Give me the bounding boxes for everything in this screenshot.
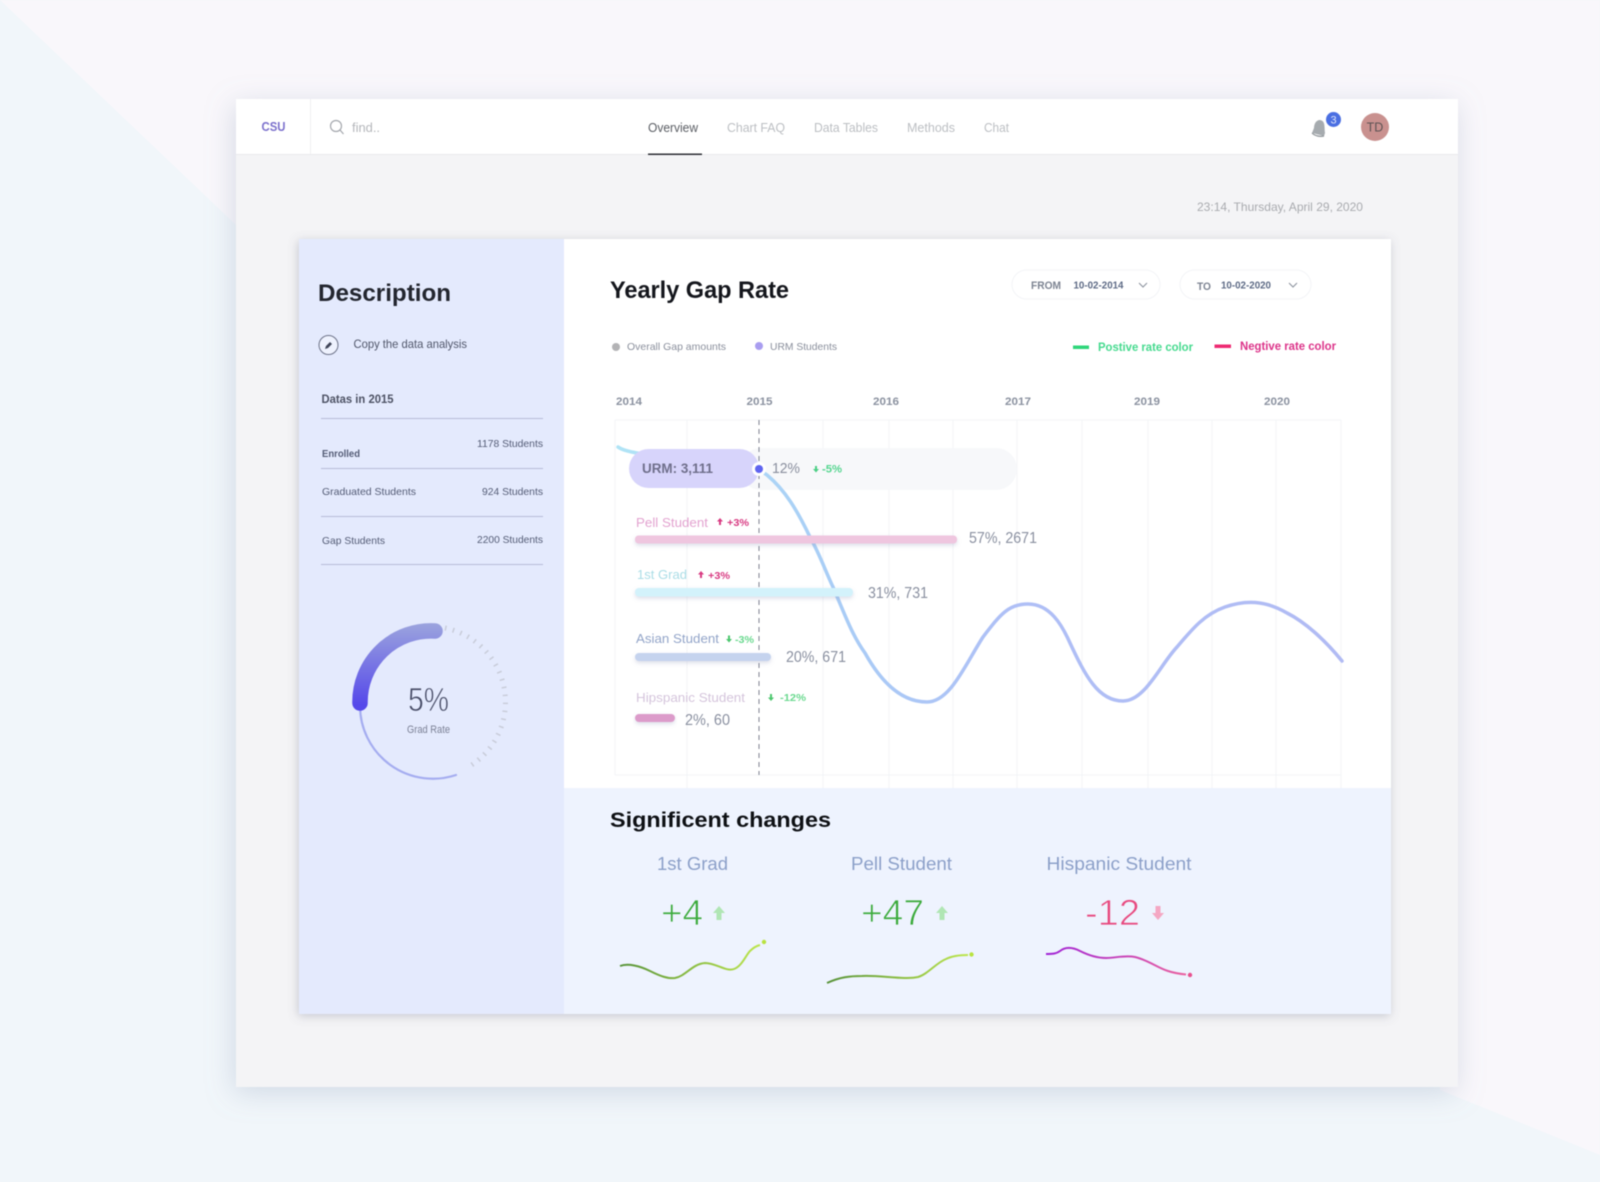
- bar: asian student: Asian Student: [636, 631, 719, 646]
- active nav tab: Overview: [648, 120, 699, 135]
- bar: pell student: Pell Student: [636, 515, 708, 530]
- nav links: Chat: [984, 120, 1009, 135]
- chart: year axis labels: 2017: [1005, 396, 1031, 408]
- icon: notification bell: [1312, 112, 1341, 136]
- bar: pell student: +3%: [727, 517, 750, 529]
- user avatar: [1361, 113, 1389, 141]
- search box: find..: [352, 120, 380, 135]
- bar: 1st grad: [635, 567, 928, 602]
- stat: 1st grad: [620, 854, 766, 978]
- gauge: grad rate: Grad Rate: [407, 724, 450, 736]
- data list: Datas in 2015: [322, 392, 394, 406]
- heading: description: Description: [318, 280, 451, 307]
- chart: year axis labels: 2016: [873, 396, 899, 408]
- stat: hispanic student: Hispanic Student: [1046, 854, 1192, 874]
- urm value: [772, 460, 842, 477]
- date range: from: FROM: [1031, 280, 1061, 292]
- data list: 2200 Students: [477, 534, 543, 546]
- urm pill: [629, 449, 759, 488]
- nav links: Chart FAQ: [727, 120, 785, 135]
- timestamp: 23:14, Thursday, April 29, 2020: [1197, 200, 1363, 214]
- active nav tab: [648, 120, 702, 155]
- stat: pell student: +47: [861, 892, 924, 933]
- data list: Gap Students: [322, 535, 385, 547]
- top navigation bar: [236, 99, 1458, 155]
- bar: 1st grad: 1st Grad: [637, 567, 687, 582]
- stat: pell student: Pell Student: [851, 854, 952, 874]
- legend: series: [612, 341, 837, 353]
- legend: series: URM Students: [770, 341, 837, 353]
- urm pill: URM: 3,111: [642, 461, 713, 476]
- stat: 1st grad: 1st Grad: [657, 854, 728, 874]
- nav links: [727, 120, 1009, 135]
- date range: to: TO: [1197, 281, 1211, 293]
- data list: Enrolled: [322, 448, 360, 460]
- bar: asian student: -3%: [735, 634, 755, 646]
- legend: positive and negative colors: [1073, 339, 1336, 354]
- bar: pell student: [635, 515, 1037, 547]
- chart: year axis labels: 2014: [616, 396, 643, 408]
- chart: year axis labels: [616, 396, 1290, 408]
- chart: gap rate curve: [618, 447, 1342, 702]
- main card: [299, 239, 1391, 1014]
- stat: hispanic student: -12: [1085, 892, 1140, 933]
- date range: from: [1012, 270, 1160, 299]
- bar: pell student: 57%, 2671: [969, 530, 1037, 547]
- bar: 1st grad: +3%: [708, 570, 731, 582]
- bar: hispanic student: 2%, 60: [685, 712, 730, 729]
- user avatar: TD: [1367, 120, 1383, 134]
- bar: asian student: 20%, 671: [786, 649, 846, 666]
- panel: description sidebar: [299, 239, 564, 1014]
- legend: series: Overall Gap amounts: [627, 341, 726, 353]
- bar: hispanic student: Hipspanic Student: [636, 690, 745, 705]
- search box: [330, 120, 380, 135]
- heading: significant changes: Significent changes: [610, 809, 831, 832]
- logo: CSU: [262, 119, 286, 134]
- bar: asian student: [635, 631, 846, 666]
- stat: 1st grad: +4: [661, 892, 703, 933]
- chart: year axis labels: 2020: [1264, 396, 1290, 408]
- stat: hispanic student: [1046, 854, 1192, 977]
- stat: pell student: [827, 854, 974, 983]
- date range: from: 10-02-2014: [1074, 280, 1124, 292]
- nav links: Data Tables: [814, 120, 878, 135]
- chart: year axis labels: 2019: [1134, 396, 1160, 408]
- icon: notification bell: 3: [1330, 114, 1337, 126]
- copy action: Copy the data analysis: [354, 337, 467, 351]
- legend: positive and negative colors: Postive rate color: [1098, 340, 1193, 354]
- heading: yearly gap rate: Yearly Gap Rate: [610, 277, 789, 304]
- urm value: 12%: [772, 460, 800, 477]
- legend: positive and negative colors: Negtive rate color: [1240, 339, 1336, 353]
- highlight row background: [740, 448, 1017, 490]
- dashboard window: [236, 99, 1458, 1087]
- data list: 924 Students: [482, 486, 543, 498]
- bar: hispanic student: [635, 690, 807, 729]
- date range: to: 10-02-2020: [1221, 280, 1271, 292]
- selected year marker: [752, 420, 766, 775]
- data list: Graduated Students: [322, 486, 416, 498]
- data list: 1178 Students: [477, 438, 543, 450]
- nav links: Methods: [907, 120, 955, 135]
- data list: [321, 392, 543, 564]
- date range: to: [1180, 270, 1311, 299]
- bar: hispanic student: -12%: [780, 692, 807, 704]
- gauge: grad rate: [360, 628, 505, 779]
- panel: significant changes: [564, 788, 1391, 1014]
- urm value: -5%: [822, 464, 842, 476]
- bar: 1st grad: 31%, 731: [868, 585, 928, 602]
- copy action: [319, 336, 467, 354]
- panel: yearly gap rate: [610, 270, 1342, 788]
- chart: year axis labels: 2015: [746, 396, 772, 408]
- gauge: grad rate: 5%: [408, 681, 449, 718]
